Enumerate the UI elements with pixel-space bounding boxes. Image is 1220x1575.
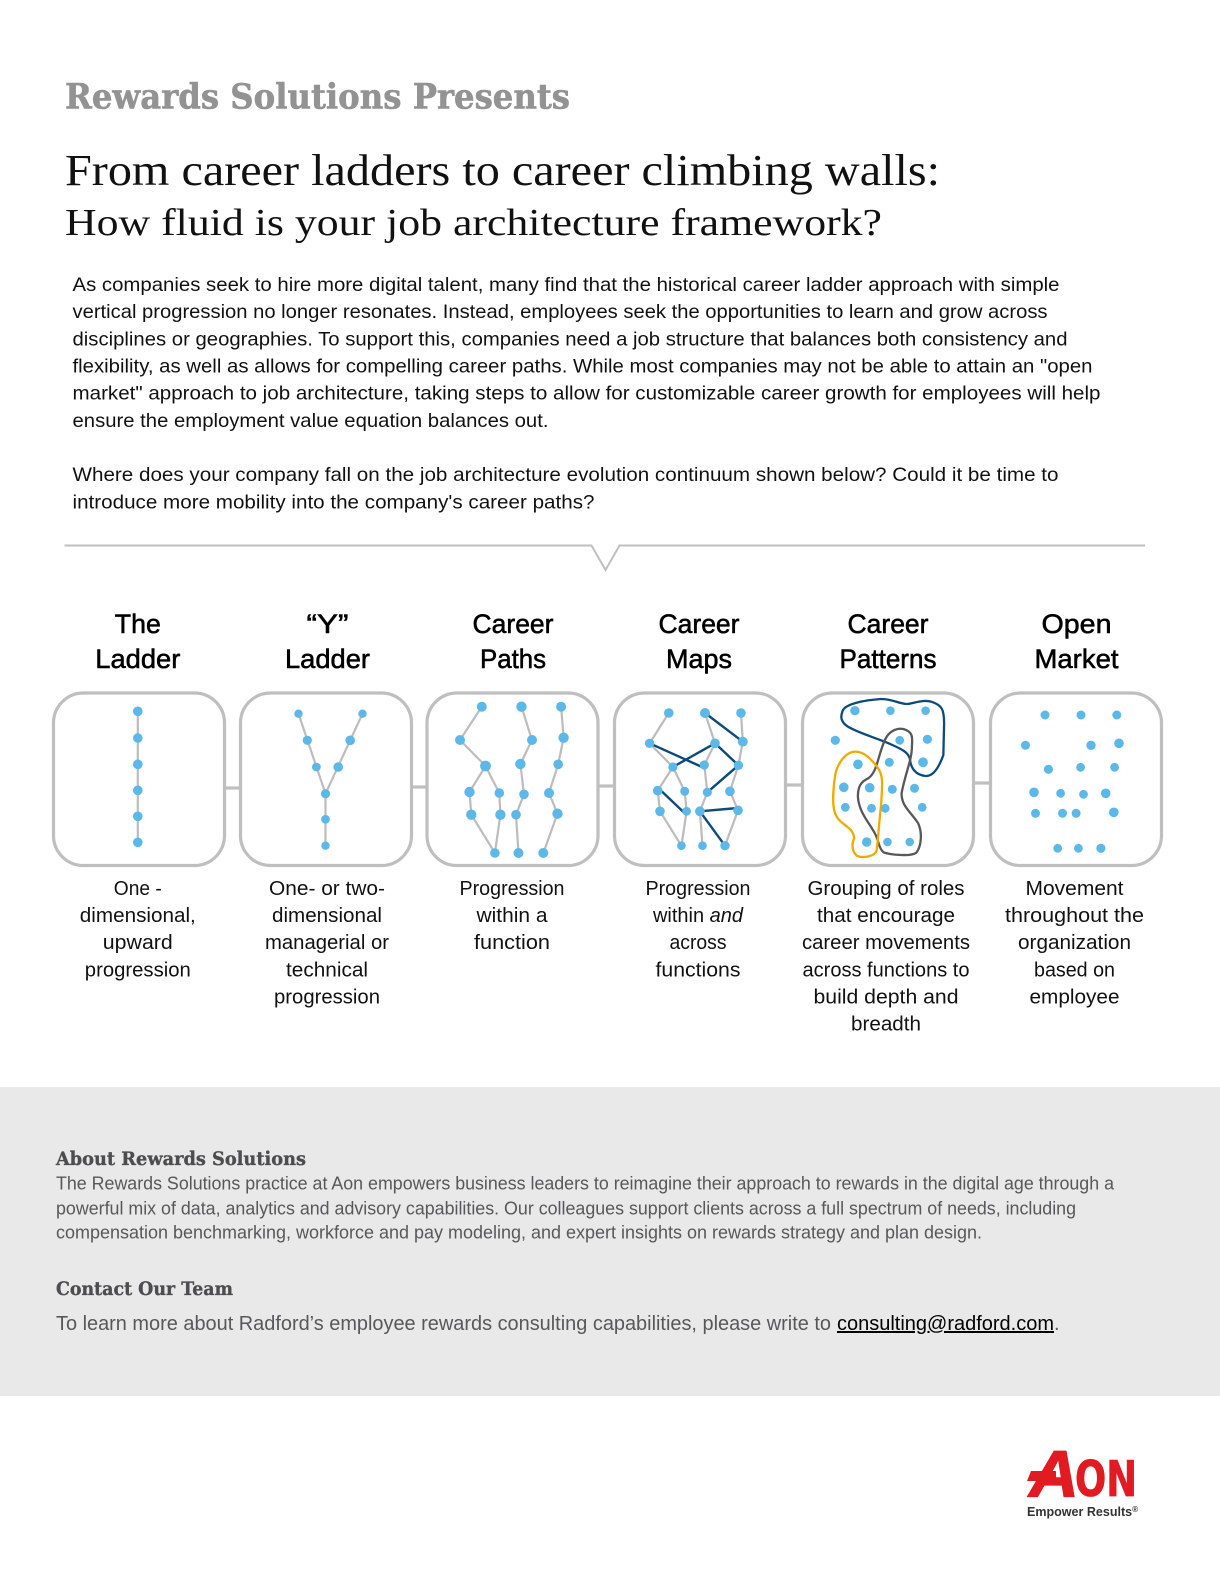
title xyxy=(65,146,940,244)
title: From career ladders to career climbing walls: xyxy=(65,146,940,195)
logo: Aon Empower Results: ® xyxy=(1132,1505,1138,1514)
title: How fluid is your job architecture framework? xyxy=(65,202,882,244)
description: Career Patterns: breadth xyxy=(851,1014,921,1036)
logo: Aon Empower Results: ON xyxy=(1075,1451,1137,1508)
description: Career Maps xyxy=(646,878,750,981)
description: Career Maps: within and xyxy=(652,905,744,927)
logo: Aon Empower Results xyxy=(1027,1436,1138,1519)
heading: Career Paths: Career xyxy=(472,609,554,639)
description: The Ladder: One - xyxy=(114,878,162,900)
heading: Y Ladder: “Y” xyxy=(306,609,348,639)
stage: Career Maps xyxy=(614,609,786,981)
description: Career Maps: functions xyxy=(656,959,740,981)
diagram: career maps xyxy=(614,693,786,866)
stage: Y Ladder xyxy=(240,609,412,1008)
heading: Career Paths: Paths xyxy=(480,644,546,674)
heading: Career Patterns: Career xyxy=(848,609,929,639)
description: The Ladder: dimensional, xyxy=(80,905,196,927)
contact text: consulting@radford.com xyxy=(837,1313,1054,1335)
intro text block: disciplines or geographies. To support this, companies need a job structure that balances both consistency and xyxy=(72,328,1068,350)
about text: powerful mix of data, analytics and advisory capabilities. Our colleagues support clients across a full spectrum of needs, including xyxy=(56,1198,1076,1218)
connectors between stages xyxy=(226,783,990,788)
description: Open Market: organization xyxy=(1018,932,1131,954)
overline heading: Rewards Solutions Presents xyxy=(65,76,570,118)
diagram: career paths xyxy=(427,693,598,866)
intro text block: Where does your company fall on the job architecture evolution continuum shown below? Could it be time to xyxy=(72,464,1059,486)
about text: The Rewards Solutions practice at Aon empowers business leaders to reimagine their approach to rewards in the digital age through a xyxy=(56,1173,1115,1193)
intro text block: market" approach to job architecture, taking steps to allow for customizable career growth for employees will help xyxy=(72,383,1101,405)
description: Y Ladder: managerial or xyxy=(265,932,389,954)
heading: Career Maps xyxy=(658,609,740,674)
description: Career Patterns: across functions to xyxy=(802,959,970,981)
heading: Career Patterns: Patterns xyxy=(840,644,936,674)
logo: Aon Empower Results: Empower Results xyxy=(1027,1505,1132,1519)
heading: Open Market: Market xyxy=(1034,644,1119,674)
logo: Aon Empower Results: A xyxy=(1027,1436,1079,1510)
description: Open Market: Movement xyxy=(1026,878,1124,900)
heading: The Ladder xyxy=(95,609,180,674)
diagram: career patterns xyxy=(802,693,974,866)
description: Career Paths: within a xyxy=(475,905,548,927)
description: Career Patterns: build depth and xyxy=(814,986,958,1008)
description: Career Paths xyxy=(460,878,564,954)
intro text block: ensure the employment value equation balances out. xyxy=(72,410,548,432)
diagram: ladder xyxy=(54,693,224,866)
heading: Open Market xyxy=(1034,609,1119,674)
intro text block: vertical progression no longer resonates. Instead, employees seek the opportunities to learn and grow across xyxy=(72,301,1048,323)
heading: Open Market: Open xyxy=(1042,609,1112,639)
diagram: Y ladder xyxy=(240,693,412,866)
description: Career Patterns: Grouping of roles xyxy=(808,878,964,900)
description: Y Ladder: One- or two- xyxy=(269,878,385,900)
description: Y Ladder: dimensional xyxy=(272,905,382,927)
description: Career Patterns xyxy=(802,878,970,1036)
divider with notch pointer xyxy=(64,546,1145,570)
about text xyxy=(56,1173,1115,1242)
heading: Y Ladder xyxy=(285,609,370,674)
description: Open Market: throughout the xyxy=(1005,905,1144,927)
description: Open Market: employee xyxy=(1030,986,1120,1008)
description: The Ladder xyxy=(80,878,196,981)
description: Career Paths: Progression xyxy=(460,878,564,900)
intro text block: flexibility, as well as allows for compelling career paths. While most companies may not be able to attain an "open xyxy=(72,356,1092,378)
description: Career Patterns: career movements xyxy=(802,932,970,954)
contact text: To learn more about Radford’s employee rewards consulting capabilities, please write to xyxy=(56,1313,831,1335)
description: The Ladder: progression xyxy=(85,959,191,981)
diagram: open market xyxy=(990,693,1162,866)
contact text: . xyxy=(1054,1313,1060,1335)
description: Career Paths: function xyxy=(474,932,550,954)
footer panel xyxy=(0,1087,1220,1396)
stage: The Ladder xyxy=(54,609,224,981)
heading: Career Maps: Career xyxy=(658,609,740,639)
description: Career Patterns: that encourage xyxy=(817,905,955,927)
description: Y Ladder xyxy=(265,878,389,1008)
heading: The Ladder: The xyxy=(115,609,161,639)
description: Y Ladder: technical xyxy=(286,959,368,981)
heading: Career Paths xyxy=(472,609,554,674)
description: Career Maps: Progression xyxy=(646,878,750,900)
description: Open Market: based on xyxy=(1034,959,1115,981)
description: Y Ladder: progression xyxy=(274,986,380,1008)
description: Open Market xyxy=(1005,878,1144,1008)
stage: Career Paths xyxy=(427,609,598,954)
description: Career Maps: across xyxy=(670,932,726,954)
description: The Ladder: upward xyxy=(103,932,173,954)
heading: Y Ladder: Ladder xyxy=(285,644,370,674)
intro text block: As companies seek to hire more digital talent, many find that the historical career ladder approach with simple xyxy=(72,274,1060,296)
heading: Career Patterns xyxy=(840,609,936,674)
intro text block: introduce more mobility into the company's career paths? xyxy=(72,491,595,513)
intro text block xyxy=(72,274,1101,513)
heading: Career Maps: Maps xyxy=(666,644,732,674)
heading: The Ladder: Ladder xyxy=(95,644,180,674)
about text: compensation benchmarking, workforce and pay modeling, and expert insights on rewards strategy and plan design. xyxy=(56,1222,982,1242)
stage: Open Market xyxy=(990,609,1162,1008)
stage: Career Patterns xyxy=(802,609,974,1036)
heading: Contact Our Team: Contact Our Team xyxy=(56,1278,233,1300)
heading: About Rewards Solutions: About Rewards Solutions xyxy=(55,1148,306,1170)
